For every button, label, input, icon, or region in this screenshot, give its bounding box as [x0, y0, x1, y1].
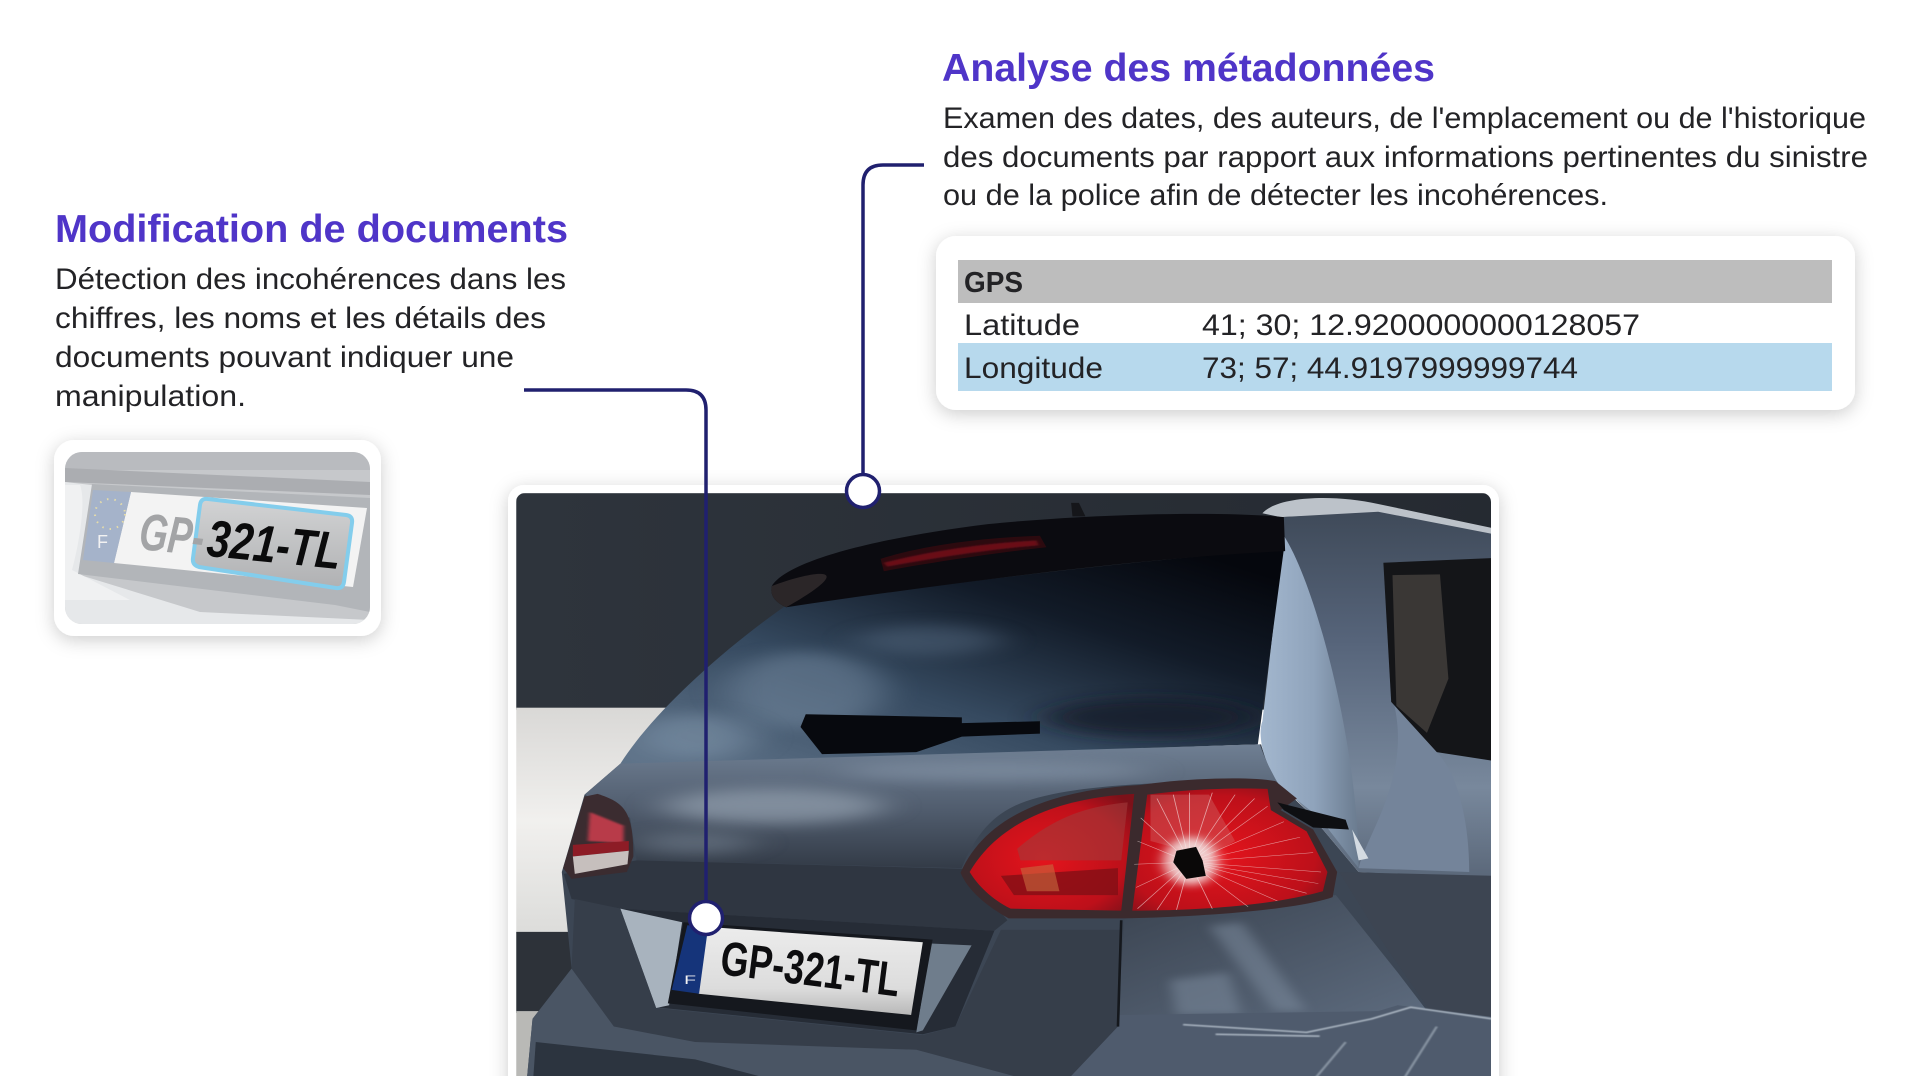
panel: GPS metadata table	[936, 236, 1855, 410]
text block: modification de documents: Détection des incohérences dans les	[55, 263, 566, 296]
table row: longitude: Longitude	[964, 352, 1103, 385]
tail light	[961, 778, 1337, 918]
quarter panel below tail light	[1118, 895, 1430, 1015]
plate text: GP-	[137, 503, 207, 567]
D pillar	[1261, 536, 1359, 868]
impact cracks	[1134, 793, 1321, 910]
text block: analyse des métadonnées: Examen des dates, des auteurs, de l'emplacement ou de l'historique	[943, 102, 1866, 135]
panel: damaged car photo: F	[684, 974, 696, 987]
spoiler	[771, 514, 1285, 607]
background wall	[516, 493, 1492, 1076]
plate lettering: GP-321-TL	[718, 932, 903, 1007]
wiper	[801, 714, 1040, 754]
plate recess	[620, 909, 994, 1034]
lower tailgate	[572, 899, 1121, 1076]
plate text	[141, 514, 338, 569]
table row: longitude	[964, 352, 1578, 385]
heading: modification de documents: Modification de documents	[55, 208, 568, 251]
panel: licence plate close-up	[54, 440, 381, 636]
text block: analyse des métadonnées	[943, 102, 1868, 212]
table row: latitude: Latitude	[964, 309, 1080, 342]
roof rail	[1262, 498, 1492, 535]
plate frame	[78, 484, 370, 612]
bullet hole	[1173, 847, 1206, 879]
plate text: 321-TL	[204, 510, 344, 581]
marker: licence plate	[690, 902, 722, 934]
left tail light	[563, 794, 633, 879]
rear window	[620, 549, 1284, 764]
heading: analyse des métadonnées: Analyse des métadonnées	[942, 47, 1435, 90]
panel: damaged car photo	[508, 485, 1499, 1076]
table row: latitude	[964, 309, 1640, 342]
table row: latitude: 41; 30; 12.9200000000128057	[1202, 309, 1640, 342]
text block: modification de documents: documents pouvant indiquer une	[55, 341, 514, 374]
seam line	[1118, 920, 1121, 1027]
text block: analyse des métadonnées: ou de la police afin de détecter les incohérences.	[943, 179, 1608, 212]
connector: analyse des métadonnées to photo	[863, 165, 924, 475]
text block: modification de documents	[55, 263, 566, 413]
plate surface	[114, 492, 367, 587]
dark band below trunk	[564, 860, 1007, 931]
table row: longitude: 73; 57; 44.9197999999744	[1202, 352, 1578, 385]
highlighted region	[193, 499, 352, 588]
text block: analyse des métadonnées: des documents par rapport aux informations pertinentes du sinistre	[943, 141, 1868, 174]
broken body seam	[1277, 802, 1349, 829]
panel: licence plate close-up: F	[97, 532, 108, 552]
EU band on plate	[672, 925, 708, 994]
crumpled damage	[1059, 1005, 1492, 1076]
table header: GPS	[964, 267, 1023, 299]
trunk panel	[585, 744, 1277, 868]
EU band	[83, 490, 131, 563]
text block: modification de documents: chiffres, les noms et les détails des	[55, 302, 546, 335]
bumper	[526, 969, 1059, 1076]
connector: modification de documents to plate	[524, 390, 706, 918]
car body	[526, 498, 1492, 1076]
text block: modification de documents: manipulation.	[55, 380, 246, 413]
licence plate frame	[668, 922, 933, 1030]
marker: photo metadata	[846, 474, 880, 508]
side window	[1383, 558, 1492, 761]
